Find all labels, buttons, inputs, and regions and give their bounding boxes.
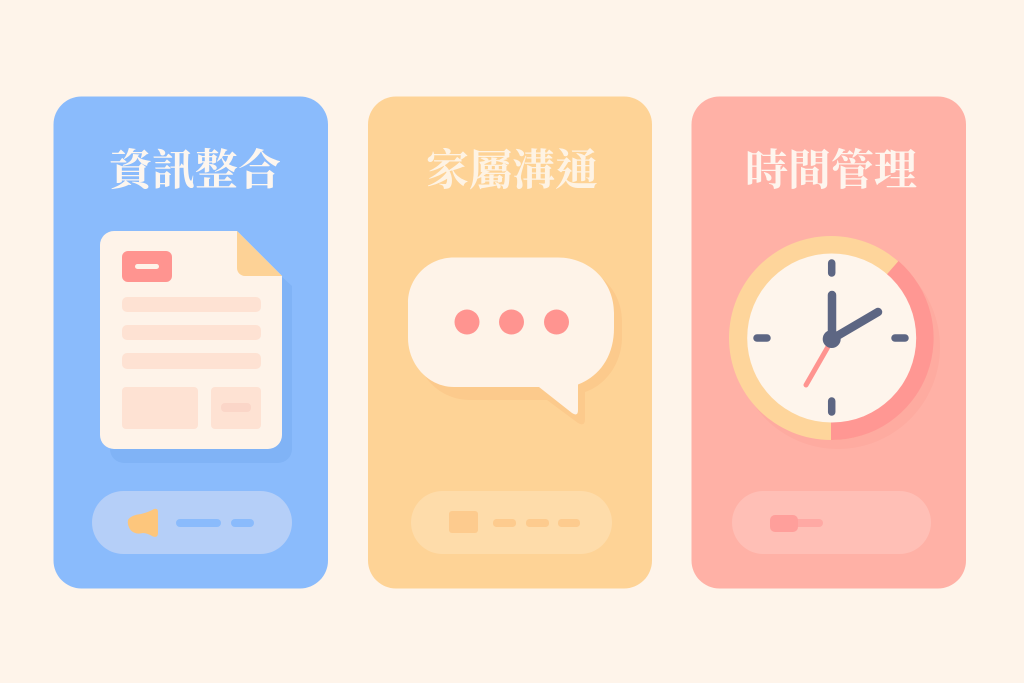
icon: speech bubble: [408, 258, 622, 424]
heading: information integration: 資訊整合: [109, 147, 281, 195]
pill: time status: [732, 491, 931, 554]
panel: time management: [692, 96, 966, 588]
icon: document: [100, 231, 292, 463]
icon: slider marker: [770, 515, 823, 532]
panel: information integration: [54, 96, 328, 588]
icon: megaphone: [128, 509, 158, 537]
pill: message status: [411, 491, 612, 554]
panel: family communication: [368, 96, 652, 588]
pill: announcement status: [92, 491, 292, 554]
icon: square marker: [449, 511, 478, 533]
heading: family communication: 家屬溝通: [426, 147, 598, 195]
heading: time management: 時間管理: [745, 147, 917, 195]
icon: clock: [729, 236, 940, 449]
